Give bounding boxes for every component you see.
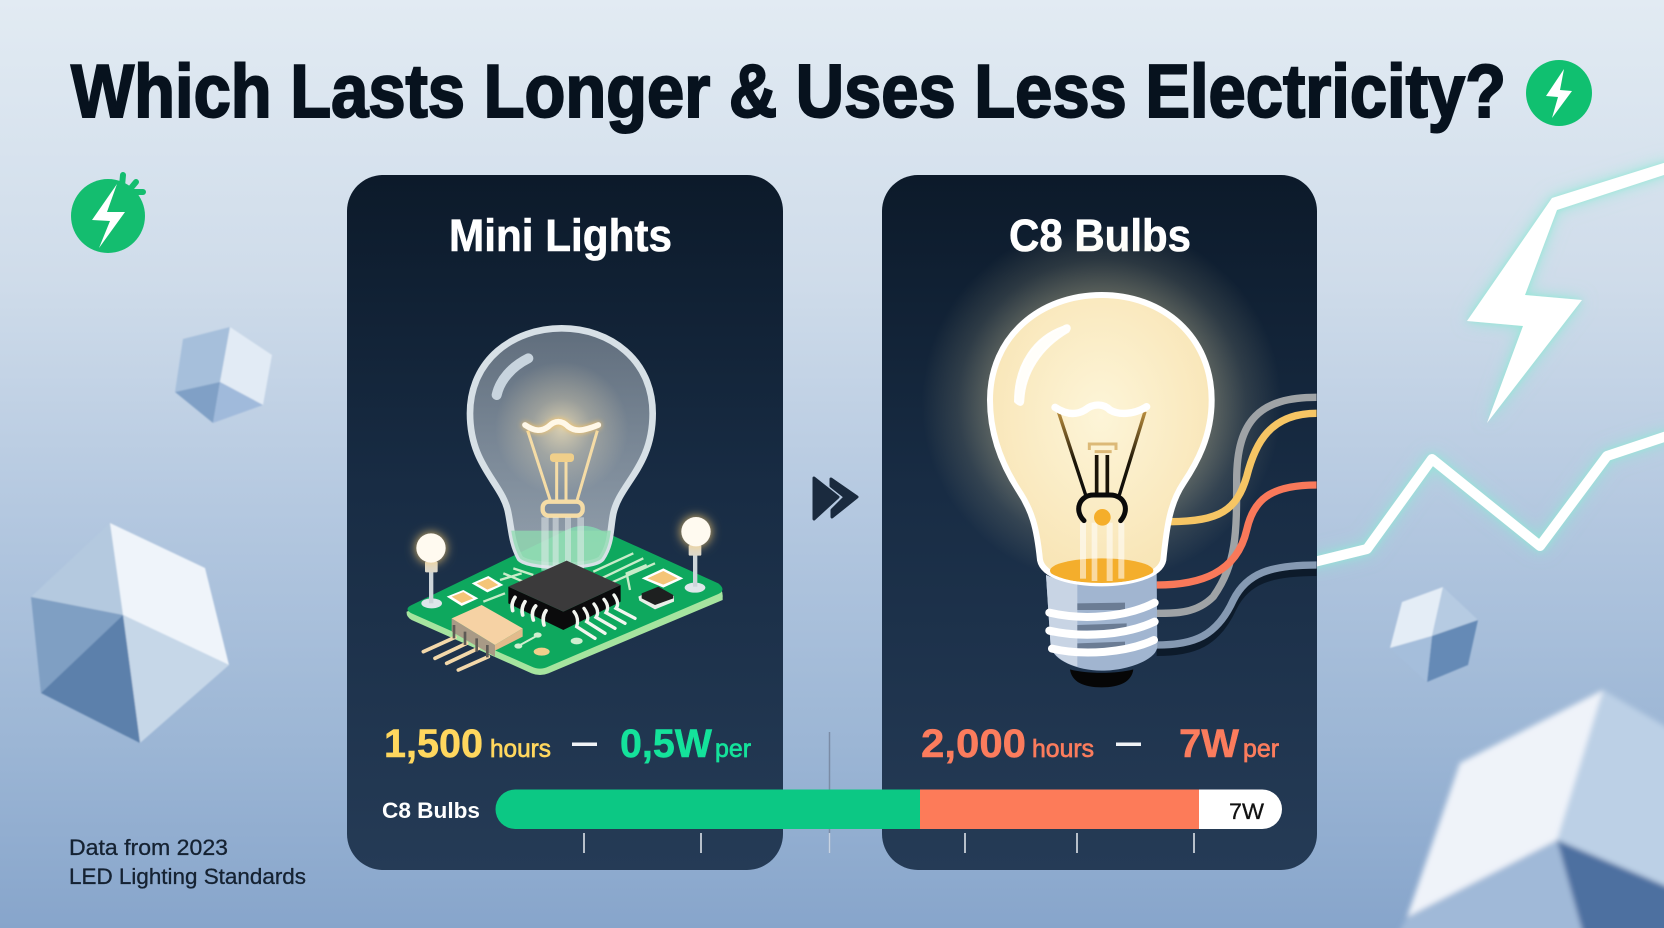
pin header connector	[423, 605, 523, 670]
center vertical divider	[828, 732, 830, 853]
stats: hours and watts for C8 Bulbs: 7W	[1179, 722, 1239, 766]
stats: hours and watts for C8 Bulbs	[921, 722, 1279, 766]
bar track and segments	[495, 789, 1283, 830]
title: Which Lasts Longer & Uses Less Electricity?	[71, 49, 1506, 133]
decorative cube: small right	[1390, 587, 1478, 682]
scale ticks	[584, 833, 1194, 853]
amber pool at base	[1050, 558, 1153, 583]
heading: C8 Bulbs: C8 Bulbs	[1009, 210, 1191, 261]
filament glow	[495, 362, 628, 495]
glass highlight	[1015, 325, 1070, 405]
decorative cube: large lower left	[31, 523, 229, 743]
heading: Mini Lights: Mini Lights	[449, 210, 672, 261]
filament supports	[528, 431, 597, 516]
right indicator light	[681, 517, 711, 593]
lightning bolt graphic	[1467, 161, 1664, 423]
source note: LED Lighting Standards	[69, 864, 306, 889]
circuit board	[407, 526, 723, 675]
comparison bar	[382, 789, 1283, 853]
decorative cube: small upper left	[175, 327, 272, 423]
glowing filament	[525, 422, 598, 430]
glass envelope	[990, 295, 1212, 583]
source note: Data from 2023	[69, 835, 228, 860]
icon: double chevron arrow	[814, 478, 857, 519]
card background	[882, 175, 1317, 870]
stats: hours and watts for Mini Lights: 1,500	[384, 722, 483, 766]
stats: hours and watts for C8 Bulbs: hours	[1032, 735, 1094, 763]
stats: hours and watts for Mini Lights	[384, 722, 751, 766]
lead wires	[1080, 523, 1124, 581]
illustration: clear bulb on circuit board	[407, 328, 723, 675]
panel: Mini Lights	[347, 175, 783, 870]
outer glow	[932, 234, 1270, 559]
illustration: lit bulb with wires	[922, 223, 1317, 687]
left indicator light	[416, 533, 446, 608]
electric pulse line	[1310, 435, 1664, 563]
microchip	[508, 561, 635, 638]
icon: charging bolt badge	[71, 175, 145, 253]
bar label: C8 Bulbs	[382, 798, 480, 823]
panel: C8 Bulbs	[882, 175, 1317, 870]
stats: hours and watts for Mini Lights: 0,5W	[620, 722, 712, 766]
card background	[347, 175, 783, 870]
light green board seen through glass	[511, 530, 611, 566]
filament and supports	[1055, 405, 1147, 526]
glass highlight	[497, 358, 528, 395]
source note	[69, 835, 306, 889]
lead wires	[541, 517, 584, 571]
decorative cube: large bottom right	[1395, 690, 1664, 928]
icon: title lightning badge	[1526, 60, 1592, 126]
colored power wires	[1157, 397, 1317, 652]
stats: hours and watts for Mini Lights: hours	[490, 735, 551, 763]
screw base	[1046, 573, 1157, 687]
stats: hours and watts for C8 Bulbs: per	[1243, 735, 1279, 763]
stats: hours and watts for C8 Bulbs: 2,000	[921, 722, 1026, 766]
bar end value: 7W	[1229, 799, 1264, 824]
stats: hours and watts for Mini Lights: per	[715, 735, 751, 763]
glass envelope	[470, 328, 653, 566]
